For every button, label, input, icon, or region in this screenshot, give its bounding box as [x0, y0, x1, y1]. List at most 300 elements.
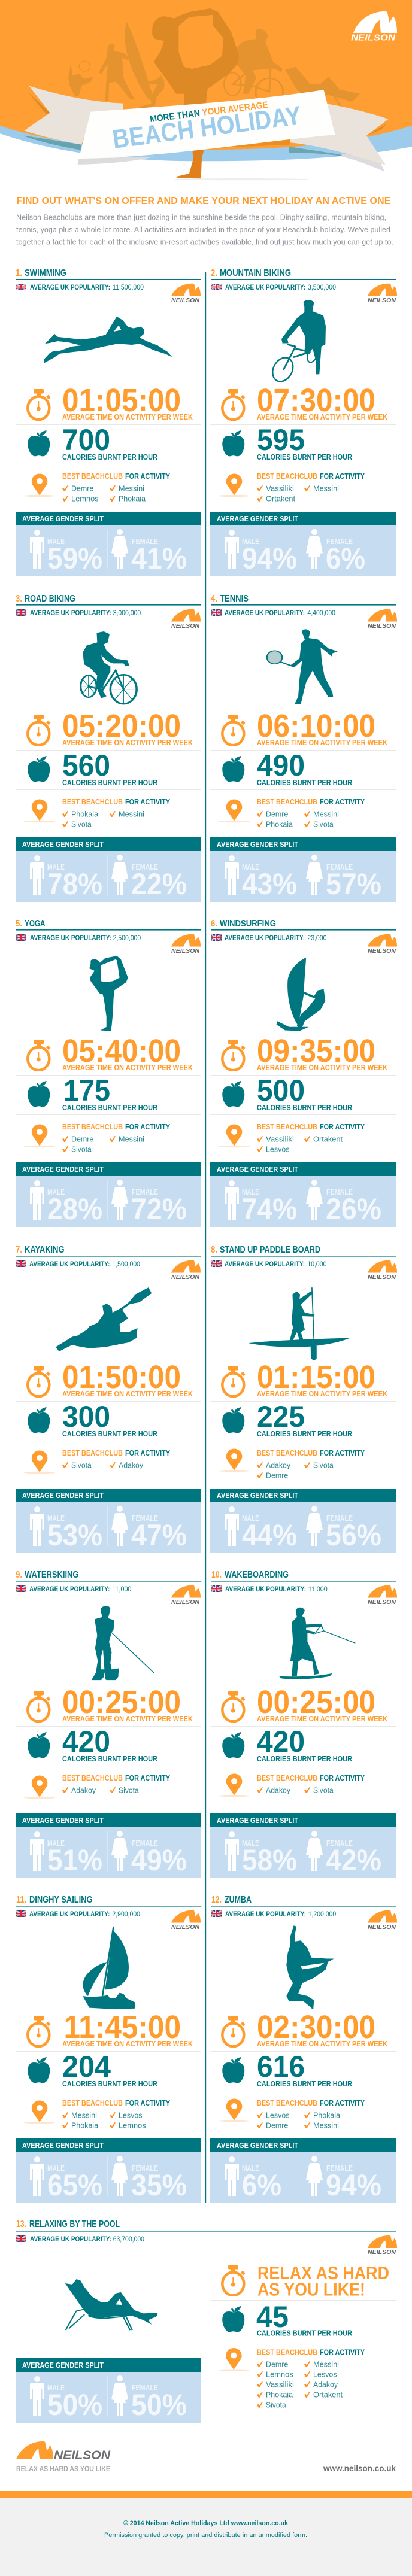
best beachclub: Adakoy [266, 1460, 290, 1470]
calories: 175 [63, 1074, 110, 1107]
best beachclub: Demre [266, 809, 288, 819]
best beachclub: BEST BEACHCLUB [257, 472, 317, 481]
panel: windsurfing [210, 919, 397, 1227]
heading [211, 1895, 396, 1907]
gender split: 74% [242, 1192, 297, 1226]
figure: waterskier [92, 1606, 154, 1680]
gender split: 50% [47, 2388, 102, 2422]
footer copyright: Permission granted to copy, print and distribute in an unmodified form. [104, 2532, 307, 2539]
best beachclub: FOR ACTIVITY [320, 2347, 365, 2357]
header banner [0, 0, 412, 180]
panel: dinghy sailing [16, 1895, 201, 2203]
best beachclub: Phokaia [266, 820, 293, 828]
best beachclub: FOR ACTIVITY [320, 1448, 365, 1457]
logo: NEILSON [171, 948, 200, 955]
ribbon [23, 86, 389, 180]
gender split: FEMALE [326, 1514, 353, 1523]
best beachclub: BEST BEACHCLUB [257, 1448, 317, 1457]
popularity [16, 2235, 144, 2243]
heading [211, 594, 396, 606]
best beachclub: Lesvos [266, 1144, 290, 1154]
logo [171, 1260, 201, 1281]
best beachclub: BEST BEACHCLUB [62, 472, 123, 481]
best beachclub: Phokaia [313, 2110, 341, 2120]
best beachclub [24, 2098, 170, 2130]
gender split: AVERAGE GENDER SPLIT [22, 1491, 104, 1500]
heading: STAND UP PADDLE BOARD [220, 1245, 320, 1255]
calories: CALORIES BURNT PER HOUR [257, 452, 353, 461]
popularity: AVERAGE UK POPULARITY: [30, 935, 111, 942]
gender split: 26% [326, 1192, 381, 1226]
heading: WATERSKIING [25, 1570, 79, 1580]
best beachclub: Lemnos [71, 494, 99, 503]
popularity: 11,500,000 [113, 284, 144, 291]
best beachclub: Lesvos [119, 2110, 143, 2120]
gender split: 94% [242, 542, 297, 575]
heading: 1. [16, 268, 22, 278]
gender split: AVERAGE GENDER SPLIT [217, 514, 298, 523]
calories: CALORIES BURNT PER HOUR [62, 452, 158, 461]
best beachclub: Sivota [313, 1786, 334, 1794]
best beachclub: BEST BEACHCLUB [62, 1448, 123, 1457]
gender split: AVERAGE GENDER SPLIT [217, 2141, 298, 2150]
gender split: 6% [326, 542, 365, 575]
gender split [16, 2358, 201, 2423]
footer copyright: © 2014 Neilson Active Holidays Ltd www.neilson.co.uk [123, 2520, 289, 2527]
calories: 45 [256, 2300, 289, 2334]
heading: 13. [16, 2219, 26, 2229]
gender split: FEMALE [132, 1187, 158, 1196]
time: AVERAGE TIME ON ACTIVITY PER WEEK [62, 412, 193, 421]
figure: paddle boarder [249, 1287, 350, 1361]
gender split: 50% [131, 2388, 187, 2422]
best beachclub [24, 1773, 170, 1799]
figure: zumba dancer [286, 1925, 334, 2010]
best beachclub: FOR ACTIVITY [320, 1122, 365, 1131]
time: AVERAGE TIME ON ACTIVITY PER WEEK [257, 412, 388, 421]
relax message: AS YOU LIKE! [258, 2279, 365, 2299]
logo [368, 284, 397, 304]
best beachclub: Messini [313, 2121, 339, 2130]
gender split: AVERAGE GENDER SPLIT [22, 514, 104, 523]
gender split: 59% [47, 542, 102, 575]
gender split: MALE [47, 2164, 65, 2173]
calories [28, 1400, 158, 1438]
time: 06:10:00 [257, 708, 375, 744]
best beachclub: Messini [313, 2359, 339, 2369]
heading: 11. [16, 1895, 26, 1905]
popularity: AVERAGE UK POPULARITY: [29, 1586, 110, 1593]
heading [211, 268, 396, 280]
logo [171, 1585, 201, 1606]
gender split: AVERAGE GENDER SPLIT [22, 1165, 104, 1174]
calories [222, 1400, 353, 1438]
gender split: MALE [242, 1514, 259, 1523]
best beachclub: Adakoy [119, 1460, 143, 1470]
logo: NEILSON [171, 1599, 200, 1606]
calories: 616 [257, 2050, 305, 2083]
logo: NEILSON [368, 623, 396, 630]
calories: 560 [62, 749, 110, 782]
best beachclub: BEST BEACHCLUB [62, 2098, 123, 2107]
gender split: AVERAGE GENDER SPLIT [22, 840, 104, 849]
gender split: 43% [242, 867, 297, 901]
best beachclub: FOR ACTIVITY [320, 2098, 365, 2107]
logo [368, 1585, 397, 1606]
gender split: MALE [47, 537, 65, 546]
best beachclub: BEST BEACHCLUB [257, 2347, 317, 2357]
best beachclub: BEST BEACHCLUB [257, 797, 317, 806]
calories [222, 2050, 353, 2088]
heading: 8. [211, 1245, 217, 1255]
time: AVERAGE TIME ON ACTIVITY PER WEEK [257, 1714, 388, 1723]
best beachclub: FOR ACTIVITY [125, 797, 170, 806]
figure: wakeboarder [279, 1608, 355, 1679]
footer logo: NEILSON [54, 2449, 111, 2462]
time: AVERAGE TIME ON ACTIVITY PER WEEK [62, 1714, 193, 1723]
best beachclub: Phokaia [71, 809, 99, 819]
logo: NEILSON [171, 1274, 200, 1281]
calories [28, 1725, 158, 1763]
best beachclub: Ortakent [266, 494, 295, 503]
best beachclub: Adakoy [71, 1786, 96, 1794]
banner background with sports silhouettes [0, 0, 412, 161]
intro text: together a fact file for each of the inclusive in-resort activities available, find out just how much you can get up to. [16, 238, 393, 247]
logo: NEILSON [368, 2249, 396, 2256]
neilson logo white: NEILSON [351, 32, 396, 43]
best beachclub: FOR ACTIVITY [125, 1448, 170, 1457]
gender split: 44% [242, 1518, 297, 1552]
time: 00:25:00 [257, 1684, 375, 1720]
best beachclub: FOR ACTIVITY [125, 1773, 170, 1782]
heading [16, 2219, 396, 2232]
gender split: FEMALE [132, 862, 158, 871]
heading: 5. [16, 919, 22, 929]
logo [368, 609, 397, 630]
time: AVERAGE TIME ON ACTIVITY PER WEEK [257, 2039, 388, 2048]
heading [16, 919, 201, 931]
logo [368, 1910, 397, 1931]
best beachclub: Messini [119, 809, 144, 819]
panel: tennis [210, 594, 397, 902]
popularity: AVERAGE UK POPULARITY: [225, 610, 305, 617]
popularity: 1,200,000 [308, 1911, 336, 1918]
best beachclub: Demre [71, 484, 93, 493]
best beachclub: Lesvos [313, 2370, 337, 2378]
best beachclub [24, 1448, 170, 1474]
best beachclub: Adakoy [266, 1786, 290, 1794]
figure: swimmer [44, 317, 172, 363]
best beachclub: Vassiliki [266, 484, 294, 493]
gender split [16, 1162, 201, 1227]
time: AVERAGE TIME ON ACTIVITY PER WEEK [62, 738, 193, 747]
popularity: AVERAGE UK POPULARITY: [30, 2236, 111, 2243]
best beachclub: Sivota [313, 1460, 334, 1470]
heading: 3. [16, 594, 22, 604]
time: 11:45:00 [63, 2009, 181, 2045]
calories: CALORIES BURNT PER HOUR [62, 1103, 158, 1112]
best beachclub: FOR ACTIVITY [320, 1773, 365, 1782]
panel: kayaking [16, 1245, 201, 1553]
heading: WAKEBOARDING [225, 1570, 289, 1580]
footer band [0, 2491, 412, 2498]
time: 01:05:00 [62, 382, 181, 418]
gender split: 6% [242, 2168, 281, 2202]
popularity: 23,000 [307, 935, 326, 942]
heading [211, 1245, 396, 1257]
figure: windsurfer [277, 958, 325, 1031]
gender split: 94% [326, 2168, 381, 2202]
heading: 12. [211, 1895, 222, 1905]
best beachclub: Messini [119, 1135, 144, 1143]
panel: zumba [210, 1895, 397, 2203]
heading: 4. [211, 594, 217, 604]
website: www.neilson.co.uk [323, 2463, 396, 2473]
gender split: 47% [131, 1518, 187, 1552]
panel: mountain biking [210, 268, 397, 576]
logo: NEILSON [368, 297, 396, 304]
gender split: AVERAGE GENDER SPLIT [217, 1491, 298, 1500]
heading: WINDSURFING [220, 919, 276, 929]
gender split [210, 2138, 396, 2203]
panel: road biking [16, 594, 201, 902]
best beachclub [24, 1122, 170, 1154]
intro text: tennis, yoga plus a whole lot more. All activities are included in the price of your Beachclub holiday. We've pulled [16, 226, 390, 234]
heading: 7. [16, 1245, 22, 1255]
gender split [210, 1813, 396, 1878]
best beachclub: Messini [313, 484, 339, 493]
panel: yoga [16, 919, 201, 1227]
logo: NEILSON [171, 297, 200, 304]
best beachclub: Adakoy [313, 2380, 338, 2389]
gender split: FEMALE [132, 2164, 158, 2173]
gender split: MALE [47, 1839, 65, 1848]
footer logo [16, 2441, 111, 2473]
calories: CALORIES BURNT PER HOUR [257, 2079, 353, 2088]
gender split: FEMALE [326, 2164, 353, 2173]
best beachclub [219, 2347, 365, 2410]
gender split: MALE [242, 1839, 259, 1848]
popularity: AVERAGE UK POPULARITY: [30, 284, 110, 291]
gender split: FEMALE [132, 1514, 158, 1523]
best beachclub: Sivota [71, 1144, 92, 1154]
popularity: 11,000 [112, 1586, 131, 1593]
heading: TENNIS [220, 594, 249, 604]
popularity [16, 284, 144, 291]
figure: road cyclist [81, 631, 137, 704]
calories: 420 [257, 1725, 305, 1758]
logo [171, 609, 201, 630]
gender split: AVERAGE GENDER SPLIT [22, 1816, 104, 1825]
figure: yoga pose [89, 956, 128, 1031]
best beachclub: BEST BEACHCLUB [257, 2098, 317, 2107]
calories [28, 2050, 158, 2088]
intro text: Neilson Beachclubs are more than just dozing in the sunshine beside the pool. Dinghy sailing, mountain biking, [16, 213, 386, 221]
calories: 490 [257, 749, 305, 782]
best beachclub: Lemnos [119, 2121, 146, 2130]
footer copyright [0, 2498, 412, 2576]
heading: KAYAKING [25, 1245, 65, 1255]
best beachclub: BEST BEACHCLUB [257, 1122, 317, 1131]
best beachclub: Ortakent [313, 2390, 343, 2399]
logo [171, 1910, 201, 1931]
gender split: FEMALE [326, 1187, 353, 1196]
time: 01:15:00 [257, 1359, 375, 1395]
calories: CALORIES BURNT PER HOUR [62, 1754, 158, 1763]
calories: CALORIES BURNT PER HOUR [257, 1103, 353, 1112]
best beachclub [219, 1773, 365, 1797]
popularity [211, 284, 336, 291]
gender split: 49% [131, 1843, 187, 1877]
logo [171, 934, 201, 955]
intro heading: FIND OUT WHAT'S ON OFFER AND MAKE YOUR NEXT HOLIDAY AN ACTIVE ONE [17, 195, 390, 206]
gender split: FEMALE [326, 1839, 353, 1848]
popularity: AVERAGE UK POPULARITY: [225, 284, 305, 291]
calories [28, 749, 158, 787]
best beachclub: Messini [119, 484, 144, 493]
gender split: MALE [47, 1187, 65, 1196]
best beachclub: Demre [266, 2121, 288, 2130]
popularity [16, 934, 141, 942]
time: AVERAGE TIME ON ACTIVITY PER WEEK [62, 2039, 193, 2048]
gender split [16, 1813, 201, 1878]
footer logo: RELAX AS HARD AS YOU LIKE [16, 2466, 110, 2473]
best beachclub [219, 797, 365, 828]
best beachclub: FOR ACTIVITY [320, 472, 365, 481]
calories: 204 [62, 2050, 111, 2083]
heading: 6. [211, 919, 217, 929]
popularity: AVERAGE UK POPULARITY: [29, 1911, 110, 1918]
popularity: 10,000 [307, 1261, 326, 1268]
best beachclub: Sivota [266, 2400, 287, 2410]
heading [211, 1570, 396, 1582]
gender split: 51% [47, 1843, 102, 1877]
calories [222, 1074, 353, 1112]
popularity: 3,500,000 [308, 284, 336, 291]
gender split: 42% [326, 1843, 381, 1877]
best beachclub: Phokaia [119, 494, 146, 503]
gender split: FEMALE [132, 537, 158, 546]
popularity: 2,500,000 [113, 935, 141, 942]
calories: 300 [62, 1400, 110, 1433]
logo [368, 1260, 397, 1281]
gender split: MALE [47, 2383, 65, 2392]
gender split: MALE [242, 862, 259, 871]
gender split [16, 2138, 201, 2203]
heading: 9. [16, 1570, 22, 1580]
time: 05:20:00 [62, 708, 181, 744]
relax message [222, 2262, 389, 2299]
calories [28, 423, 158, 461]
time: 07:30:00 [257, 382, 375, 418]
column divider [205, 272, 206, 2203]
best beachclub: Phokaia [71, 2121, 99, 2130]
best beachclub: BEST BEACHCLUB [62, 1122, 123, 1131]
popularity [16, 1910, 140, 1918]
intro text [16, 213, 393, 247]
gender split [16, 1489, 201, 1553]
best beachclub [24, 797, 170, 828]
calories: CALORIES BURNT PER HOUR [257, 1754, 353, 1763]
heading [16, 1245, 201, 1257]
figure: sun lounger [65, 2279, 157, 2330]
panel: swimming [16, 268, 201, 576]
logo [368, 934, 397, 955]
gender split [210, 837, 396, 902]
time: 09:35:00 [257, 1033, 375, 1069]
heading: ROAD BIKING [25, 594, 75, 604]
gender split [16, 837, 201, 902]
heading [16, 594, 201, 606]
gender split: 57% [326, 867, 381, 901]
popularity: AVERAGE UK POPULARITY: [225, 1586, 306, 1593]
gender split: AVERAGE GENDER SPLIT [217, 840, 298, 849]
time: AVERAGE TIME ON ACTIVITY PER WEEK [257, 738, 388, 747]
heading: MOUNTAIN BIKING [220, 268, 291, 278]
heading [16, 1570, 201, 1582]
relax message: RELAX AS HARD [258, 2262, 389, 2283]
figure: sailing dinghy [83, 1927, 135, 2009]
popularity: 11,000 [308, 1586, 328, 1593]
best beachclub [219, 472, 365, 503]
popularity [16, 609, 141, 617]
time: AVERAGE TIME ON ACTIVITY PER WEEK [257, 1389, 388, 1398]
popularity [211, 609, 335, 617]
best beachclub: Sivota [71, 820, 92, 828]
best beachclub: BEST BEACHCLUB [257, 1773, 317, 1782]
heading [16, 268, 201, 280]
gender split: 58% [242, 1843, 297, 1877]
best beachclub: Demre [71, 1135, 93, 1143]
figure: tennis player [267, 629, 338, 704]
gender split: FEMALE [132, 2383, 158, 2392]
calories [28, 1074, 158, 1112]
gender split: FEMALE [326, 862, 353, 871]
best beachclub: Lesvos [266, 2110, 290, 2120]
gender split: MALE [242, 2164, 259, 2173]
gender split: 72% [131, 1192, 187, 1226]
logo [171, 284, 201, 304]
best beachclub: Demre [266, 2359, 288, 2369]
logo: NEILSON [368, 1924, 396, 1931]
gender split: 53% [47, 1518, 102, 1552]
best beachclub [219, 1448, 365, 1480]
panel: wakeboarding [210, 1570, 397, 1878]
popularity: 3,000,000 [113, 610, 141, 617]
best beachclub: BEST BEACHCLUB [62, 797, 123, 806]
best beachclub: Vassiliki [266, 2380, 294, 2389]
best beachclub: FOR ACTIVITY [125, 2098, 170, 2107]
gender split: MALE [47, 862, 65, 871]
figure: mountain biker [268, 300, 326, 385]
gender split: 41% [131, 542, 187, 575]
heading: YOGA [25, 919, 46, 929]
best beachclub [219, 2098, 365, 2130]
gender split: FEMALE [326, 537, 353, 546]
title on ribbon: YOUR AVERAGE [201, 100, 269, 118]
heading: 10. [211, 1570, 222, 1580]
calories: CALORIES BURNT PER HOUR [62, 2079, 158, 2088]
logo: NEILSON [368, 948, 396, 955]
gender split: MALE [242, 537, 259, 546]
time: AVERAGE TIME ON ACTIVITY PER WEEK [62, 1063, 193, 1072]
popularity: AVERAGE UK POPULARITY: [30, 610, 111, 617]
popularity: 4,400,000 [307, 610, 335, 617]
best beachclub: Vassiliki [266, 1135, 294, 1143]
time: AVERAGE TIME ON ACTIVITY PER WEEK [257, 1063, 388, 1072]
gender split: AVERAGE GENDER SPLIT [22, 2141, 104, 2150]
best beachclub: Sivota [313, 820, 334, 828]
